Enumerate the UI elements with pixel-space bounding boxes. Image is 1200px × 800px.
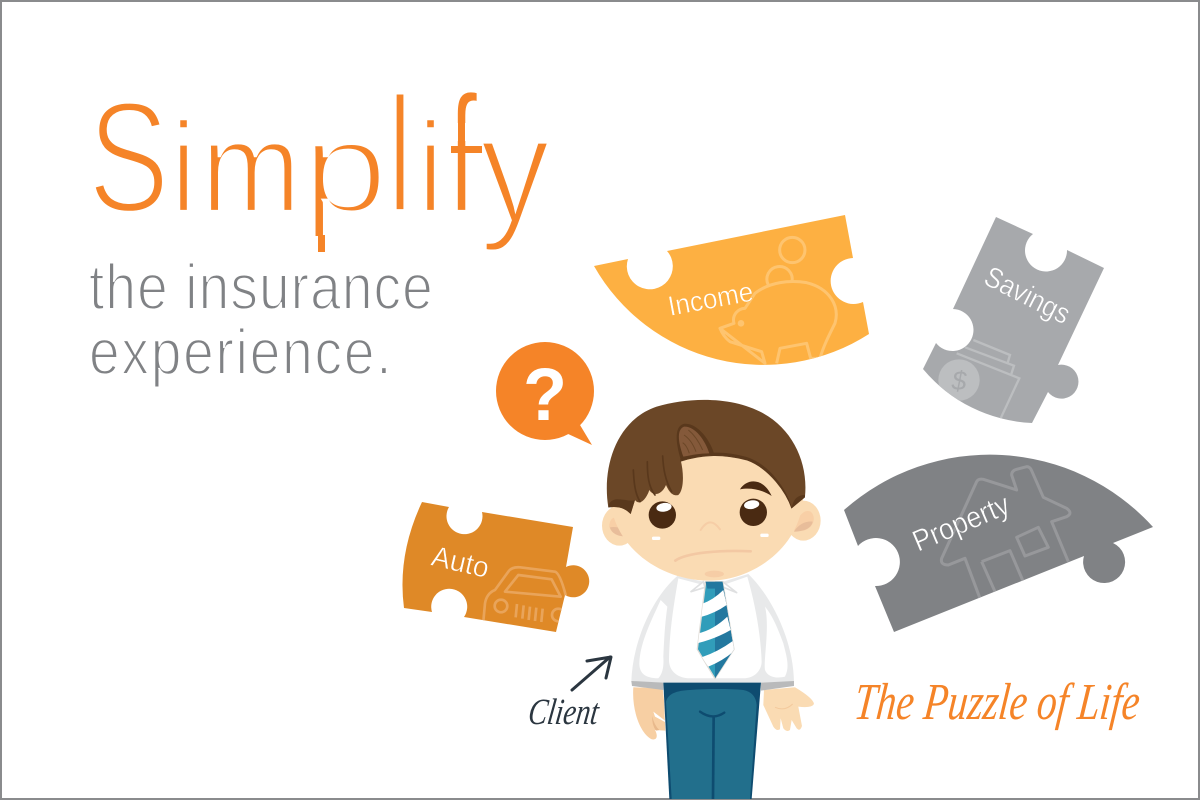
- label: Property: Property: [908, 488, 1015, 558]
- chin: [705, 571, 724, 577]
- nose: [701, 522, 720, 530]
- right eye and eyebrow: [740, 481, 772, 537]
- label: Savings: Savings: [979, 261, 1075, 331]
- character: client: [602, 400, 821, 799]
- title: Simplify: i: [171, 96, 196, 241]
- icon: banknotes and coin: $: [951, 366, 968, 396]
- title: Simplify: f: [447, 62, 478, 249]
- right hand: [763, 687, 814, 731]
- puzzle piece: auto: [402, 502, 589, 632]
- mouth: [675, 551, 751, 561]
- icon: piggy bank and coins: [720, 237, 836, 363]
- trousers: [663, 683, 761, 799]
- title: Simplify: l: [386, 63, 412, 248]
- label: Auto: Auto: [428, 541, 492, 585]
- icon: banknotes and coin: [938, 340, 1019, 418]
- puzzle piece: income: [594, 215, 869, 365]
- necktie: [697, 581, 735, 679]
- speech bubble with question mark: [496, 342, 594, 445]
- hair: [607, 400, 805, 514]
- title: Simplify: m: [201, 96, 301, 241]
- left hand: [633, 687, 665, 739]
- left eye: [649, 501, 676, 540]
- speech bubble with question mark: ?: [523, 353, 567, 436]
- arrow: pointing at client: [572, 657, 611, 690]
- puzzle piece: property: [844, 455, 1153, 632]
- icon: house: [941, 467, 1070, 598]
- icon: car: [483, 567, 568, 623]
- subtitle line: experience.: experience.: [89, 316, 393, 388]
- head: [602, 400, 821, 581]
- title: Simplify: p: [302, 96, 388, 241]
- title: Simplify: [88, 62, 550, 254]
- label: Income: Income: [665, 276, 756, 322]
- puzzle piece: savings: [923, 217, 1104, 423]
- handwritten label: Client: Client: [526, 692, 603, 733]
- title: Simplify: S: [88, 70, 169, 247]
- title: Simplify: y: [480, 86, 550, 254]
- title: Simplify: i: [418, 96, 443, 241]
- subtitle line: the insurance: the insurance: [89, 251, 434, 323]
- shirt: [631, 574, 794, 691]
